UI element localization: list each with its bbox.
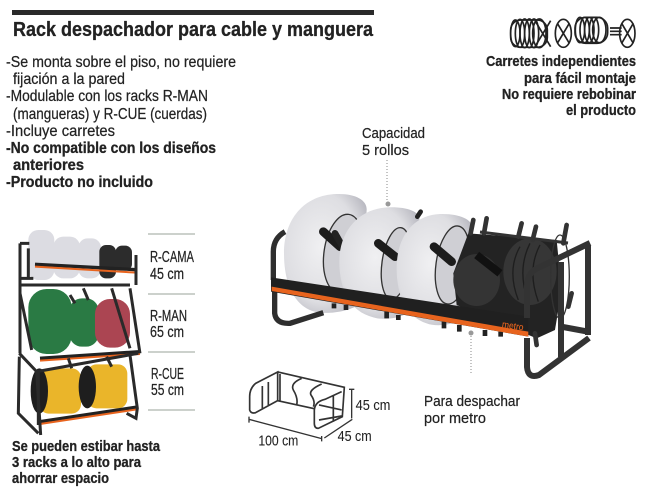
tier labels: 55 cm: [151, 382, 184, 399]
tier labels: [148, 234, 195, 410]
dimension drawing: 45 cm: [338, 428, 372, 445]
orange strip: [272, 287, 528, 337]
dimension drawing: [249, 372, 390, 450]
icon: independent reels: [511, 17, 635, 48]
feature list: -Modulable con los racks R-MAN: [6, 88, 208, 105]
reels caption: Carretes independientes: [486, 54, 636, 70]
capacity label: Capacidad: [362, 125, 425, 142]
capacity label: 5 rollos: [362, 142, 409, 159]
reels caption: No requiere rebobinar: [502, 87, 636, 103]
front bar: [271, 277, 528, 337]
dimension drawing: 100 cm: [258, 433, 298, 450]
reels caption: el producto: [566, 103, 636, 119]
dimension drawing: 45 cm: [356, 397, 390, 414]
roll 3: [397, 214, 475, 325]
title: Rack despachador para cable y manguera: [13, 19, 374, 41]
dispatch label: Para despachar: [424, 393, 520, 410]
main rack photo: [271, 194, 590, 376]
stacking note: Se pueden estibar hasta: [12, 438, 161, 455]
rack frame left: [273, 232, 501, 337]
reels caption: para fácil montaje: [524, 71, 636, 87]
capacity label: [362, 125, 425, 206]
metro label: metro: [501, 319, 524, 332]
feature list: -Producto no incluido: [6, 174, 153, 191]
rack frame: [18, 243, 140, 435]
feature list: fijación a la pared: [13, 71, 125, 88]
stacked racks photo: [18, 230, 140, 435]
R-CUE tier: [31, 364, 137, 424]
feature list: [6, 54, 236, 191]
stacking note: 3 racks a lo alto para: [12, 454, 142, 471]
black cable rolls: [453, 218, 572, 345]
feature list: anteriores: [13, 157, 84, 174]
dispatch label: por metro: [424, 410, 486, 427]
rack frame right: [480, 232, 590, 376]
tier labels: R-MAN: [150, 308, 187, 325]
R-MAN tier: [28, 289, 140, 361]
stacking note: [12, 438, 161, 487]
roll 1: [284, 194, 368, 313]
R-CAMA tier: [28, 230, 137, 280]
feature list: -Incluye carretes: [6, 123, 115, 140]
tier labels: 45 cm: [150, 266, 184, 283]
tier labels: R-CAMA: [150, 249, 194, 266]
reels caption: [486, 54, 636, 119]
feature list: -Se monta sobre el piso, no requiere: [6, 54, 236, 71]
tier labels: 65 cm: [150, 324, 184, 341]
stacking note: ahorrar espacio: [12, 470, 109, 487]
roll 2: [339, 207, 421, 319]
tier labels: R-CUE: [151, 366, 184, 383]
dispatch label: [424, 330, 520, 427]
feature list: -No compatible con los diseños: [6, 140, 216, 157]
feature list: (mangueras) y R-CUE (cuerdas): [13, 106, 207, 123]
title: [12, 10, 374, 41]
